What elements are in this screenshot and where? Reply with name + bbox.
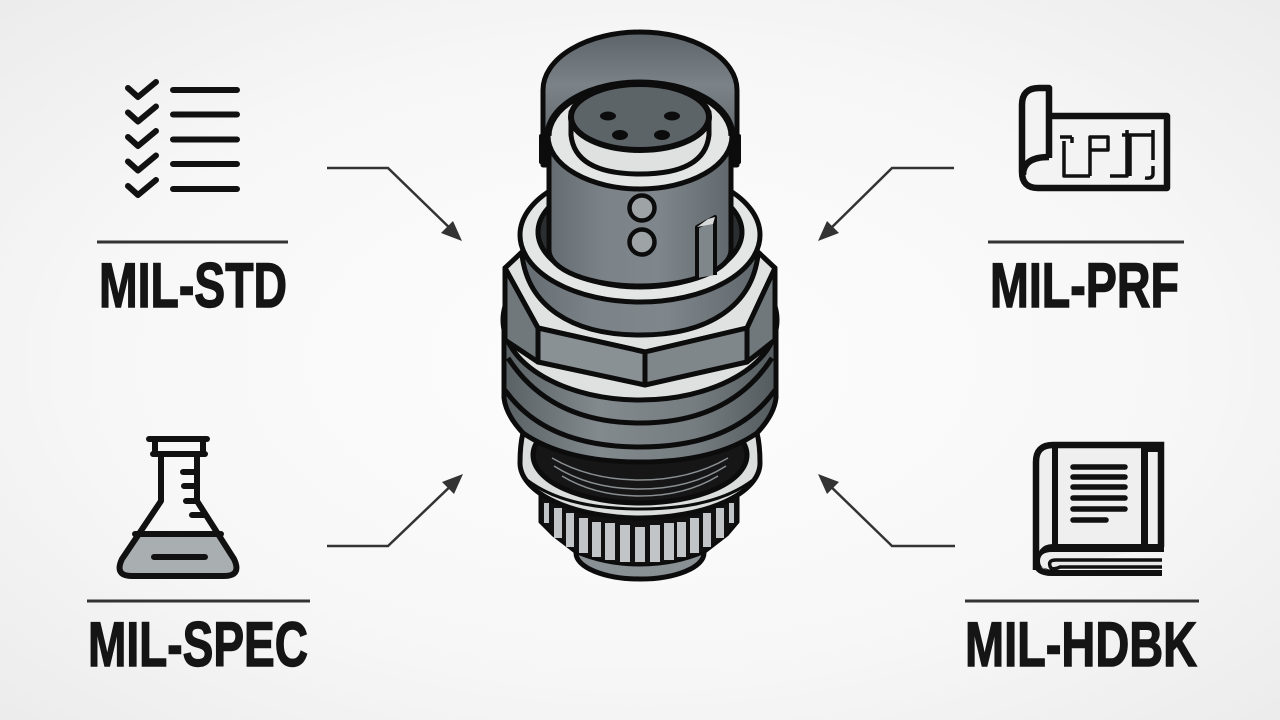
label: MIL-SPEC: MIL-SPEC [88, 610, 308, 680]
label: MIL-STD: MIL-STD [99, 251, 287, 321]
cylinder body [549, 140, 731, 286]
contact pins [600, 112, 680, 140]
connector end cap [576, 527, 704, 579]
label: MIL-HDBK: MIL-HDBK [965, 610, 1197, 680]
icon: checklist [128, 82, 237, 195]
label: MIL-STD [97, 240, 288, 321]
hex nut [505, 252, 775, 385]
key slot [697, 217, 715, 278]
label: MIL-SPEC [87, 600, 310, 680]
indicator circles [630, 196, 654, 254]
label: MIL-PRF [988, 240, 1184, 321]
arrow: top right [818, 168, 954, 241]
threaded collar [520, 168, 760, 302]
icon: flask [119, 439, 237, 576]
panel: MIL-HDBK [965, 445, 1199, 680]
icon: handbook [1036, 445, 1164, 573]
threaded body bands [503, 240, 777, 462]
contact insert [571, 84, 709, 174]
panel: MIL-PRF [988, 88, 1184, 321]
locking ring [548, 83, 732, 189]
icon: blueprint scroll [1022, 88, 1167, 188]
lower flange ring [520, 407, 760, 518]
side tabs [539, 134, 741, 164]
panel: MIL-SPEC [87, 439, 310, 680]
arrow: top left [327, 168, 462, 241]
panel: MIL-STD [97, 82, 288, 321]
hood [543, 32, 737, 165]
threads [552, 458, 728, 496]
arrow: bottom left [327, 474, 463, 546]
arrow: bottom right [818, 474, 955, 546]
connector illustration [503, 32, 777, 579]
knurled ring [540, 490, 738, 565]
label: MIL-HDBK [965, 600, 1199, 680]
label: MIL-PRF: MIL-PRF [990, 251, 1179, 321]
